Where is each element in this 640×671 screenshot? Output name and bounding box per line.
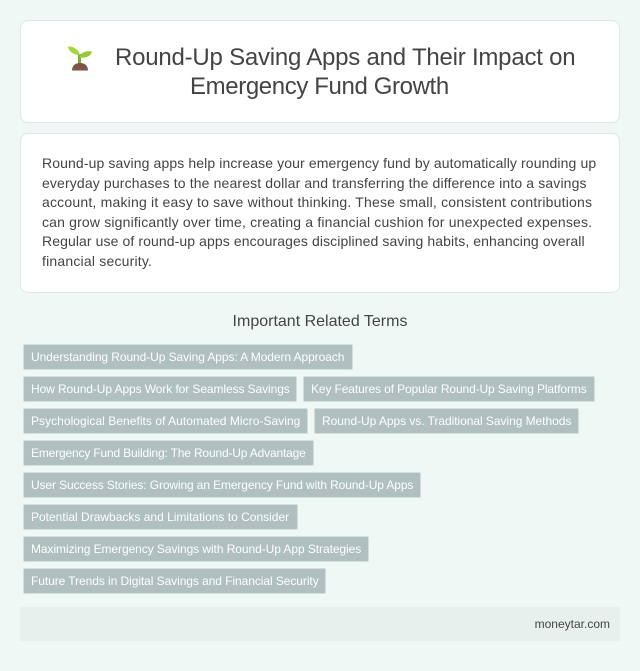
panel: description: can grow significantly over time, creating a financial cushion for unexpected expenses. (42, 214, 592, 230)
tag (23, 440, 314, 466)
title: Emergency Fund Growth (190, 73, 449, 100)
tag: Maximizing Emergency Savings with Round-Up App Strategies (31, 542, 361, 556)
tag: Round-Up Apps vs. Traditional Saving Methods (322, 414, 571, 428)
heading: related terms: Important Related Terms (233, 313, 407, 330)
panel: description: everyday purchases to the nearest dollar and transferring the difference into a savings (42, 175, 587, 191)
panel: description: Round-up saving apps help increase your emergency fund by automatically rounding up (42, 155, 596, 171)
tag (314, 408, 579, 434)
icon: seedling (68, 46, 92, 70)
tag: Future Trends in Digital Savings and Financial Security (31, 574, 319, 588)
source label: moneytar.com (535, 617, 610, 631)
tag (23, 504, 298, 530)
tag (303, 376, 595, 402)
tag: Potential Drawbacks and Limitations to Consider (31, 510, 289, 524)
tag list (23, 344, 595, 594)
tag: Understanding Round-Up Saving Apps: A Modern Approach (31, 350, 344, 364)
tag (23, 568, 326, 594)
panel: description (20, 133, 620, 293)
footer (20, 607, 620, 641)
tag: User Success Stories: Growing an Emergency Fund with Round-Up Apps (31, 478, 413, 492)
tag (23, 376, 297, 402)
panel: description: financial security. (42, 253, 152, 269)
tag (23, 472, 421, 498)
tag: Psychological Benefits of Automated Micro-Saving (31, 414, 300, 428)
title: Round-Up Saving Apps and Their Impact on (115, 44, 575, 71)
header panel (20, 20, 620, 123)
tag (23, 408, 308, 434)
panel: description: Regular use of round-up apps encourages disciplined saving habits, enhancing overall (42, 233, 585, 249)
tag: How Round-Up Apps Work for Seamless Savings (31, 382, 290, 396)
tag (23, 344, 353, 370)
panel: description: account, making it easy to save without thinking. These small, consistent contributions (42, 194, 592, 210)
title (115, 44, 575, 100)
tag (23, 536, 369, 562)
tag: Emergency Fund Building: The Round-Up Advantage (31, 446, 306, 460)
tag: Key Features of Popular Round-Up Saving Platforms (311, 382, 587, 396)
